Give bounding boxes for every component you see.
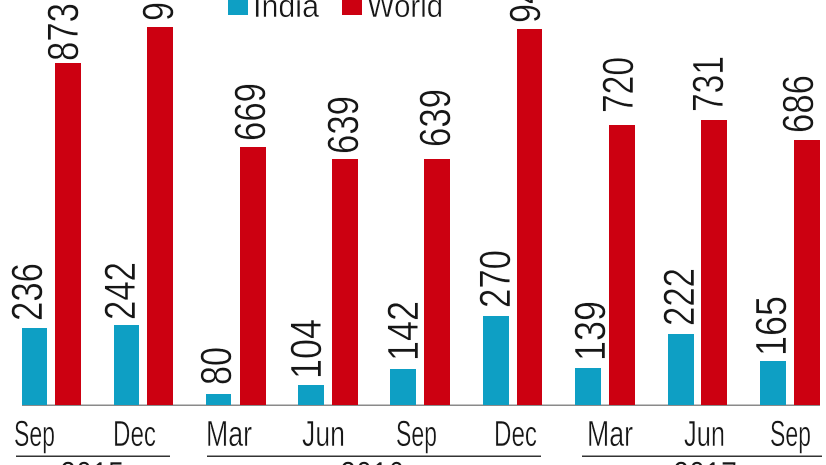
axis baseline [22, 404, 820, 406]
month labels: Dec [113, 413, 156, 454]
month labels: Sep [396, 413, 437, 454]
World value labels: 686 [774, 75, 823, 133]
month labels: Jun [684, 413, 725, 454]
India value labels [3, 250, 796, 385]
World value labels: 669 [226, 83, 275, 141]
month labels: Mar [587, 413, 633, 454]
month labels: Dec [494, 413, 537, 454]
legend [228, 0, 443, 24]
India value labels: 104 [282, 319, 331, 379]
month labels: Mar [206, 413, 252, 454]
India value labels: 222 [655, 268, 704, 326]
India value labels: 139 [566, 301, 615, 361]
World value labels: 639 [411, 89, 460, 147]
India value labels: 142 [379, 301, 428, 361]
month labels [14, 413, 811, 454]
World value labels: 731 [684, 56, 733, 112]
India value labels: 236 [3, 263, 52, 321]
World value labels: 720 [594, 57, 643, 113]
India value labels: 80 [192, 347, 241, 385]
month labels: Sep [14, 413, 55, 454]
World value labels [39, 0, 823, 154]
year labels (cropped by bottom edge) [60, 454, 737, 465]
India bars [22, 316, 786, 405]
year brackets [16, 456, 822, 457]
World value labels: 639 [319, 96, 368, 154]
India value labels: 165 [747, 296, 796, 356]
World bars [55, 27, 820, 405]
India value labels: 270 [471, 250, 520, 308]
month labels: Jun [302, 413, 345, 454]
India value labels: 242 [96, 262, 145, 320]
